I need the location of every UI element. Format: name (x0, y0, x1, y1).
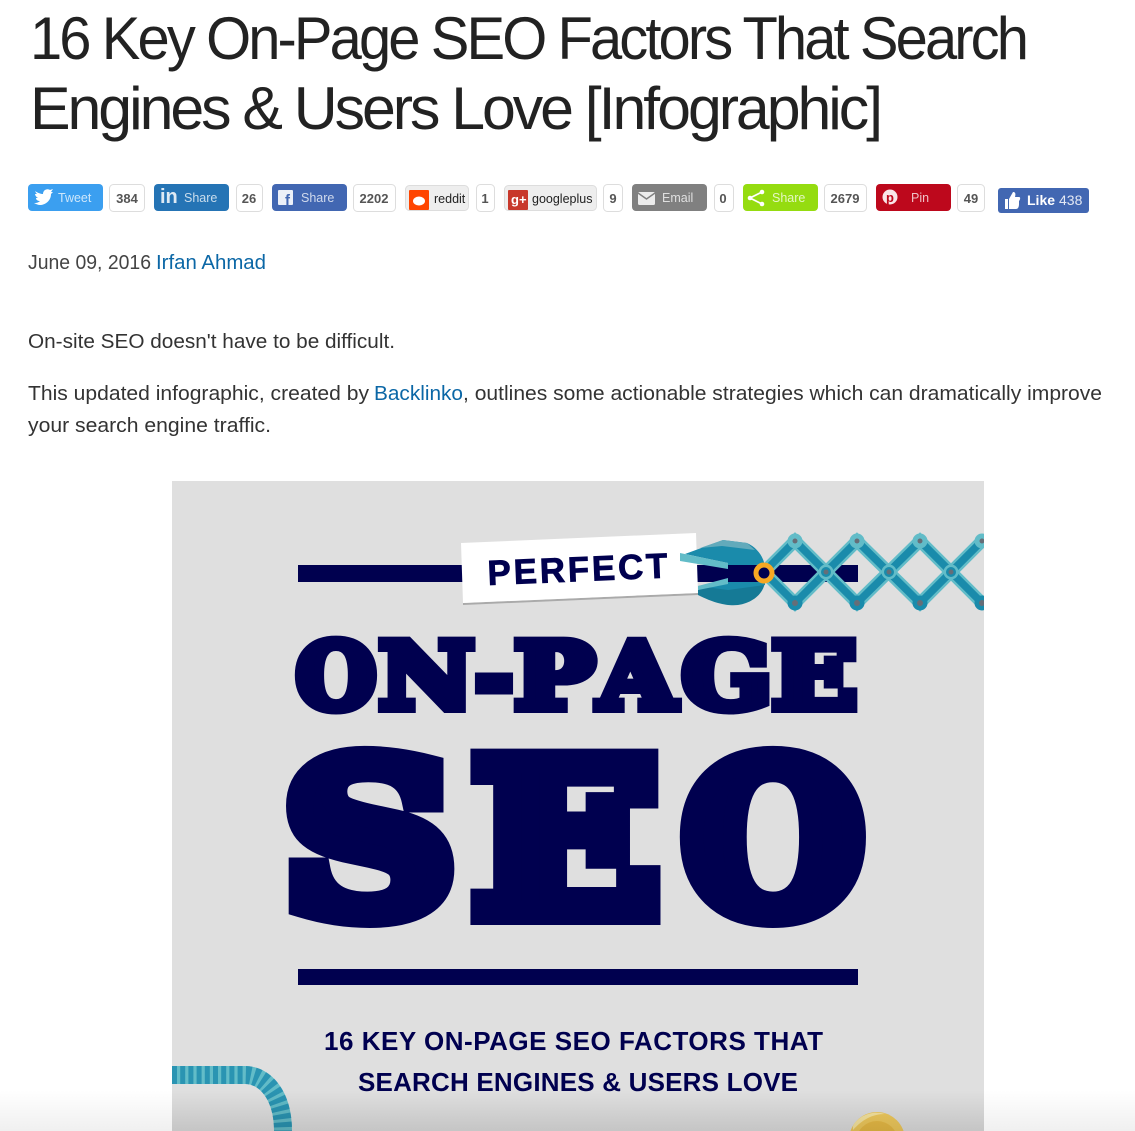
button: reddit: reddit (434, 192, 466, 206)
button: tweet: Tweet (58, 191, 92, 205)
button: tweet: 384 (116, 191, 139, 206)
infographic panel (172, 481, 1135, 1131)
icon: gold coin (849, 1112, 905, 1131)
subtitle: SEARCH ENGINES & USERS LOVE (358, 1067, 798, 1097)
button: tweet (28, 184, 144, 212)
button: googleplus (504, 184, 622, 212)
byline: Irfan Ahmad (156, 252, 266, 274)
button: linkedin: 26 (242, 191, 256, 206)
title: Engines & Users Love [Infographic] (30, 75, 880, 142)
button: googleplus: g+ (511, 192, 527, 207)
button: reddit: 1 (481, 191, 489, 206)
button: linkedin: in (160, 186, 178, 208)
heading: seo: E (473, 718, 659, 963)
top navy bar (298, 565, 858, 582)
button: email: 0 (719, 191, 727, 206)
heading: on-page: - (475, 624, 513, 730)
bottom navy bar (298, 969, 858, 985)
heading: on-page (296, 624, 857, 730)
heading: on-page: A (597, 624, 677, 730)
button: facebook like (998, 188, 1089, 213)
button: share: 2679 (831, 191, 859, 206)
intro text: This updated infographic, created by (28, 383, 369, 405)
intro text: On-site SEO doesn't have to be difficult. (28, 331, 395, 353)
button: pinterest: 49 (964, 191, 978, 206)
intro text (28, 331, 1102, 437)
social share bar (28, 184, 1089, 213)
button: googleplus: 9 (609, 191, 617, 206)
button: share: Share (772, 191, 805, 205)
button: pinterest: Pin (911, 191, 929, 205)
button: pinterest (876, 184, 984, 212)
button: reddit (406, 184, 494, 212)
button: email (632, 184, 734, 212)
button: googleplus: googleplus (532, 192, 592, 206)
intro text: your search engine traffic. (28, 415, 271, 437)
heading: seo: O (683, 718, 863, 963)
panel shading (172, 1090, 984, 1131)
subtitle (324, 1026, 823, 1097)
heading: seo (284, 718, 863, 963)
intro text: , outlines some actionable strategies which can dramatically improve (463, 383, 1102, 405)
title: 16 Key On-Page SEO Factors That Search (30, 5, 1026, 72)
icon: coiled tube (172, 1075, 283, 1131)
button: facebook (272, 184, 396, 212)
button: facebook: 2202 (360, 191, 388, 206)
button: pinterest: p (886, 190, 894, 205)
button: linkedin (154, 184, 262, 212)
button: email: Email (662, 191, 693, 205)
heading: on-page: G (682, 624, 772, 730)
button: facebook like: 438 (1059, 192, 1083, 208)
byline (28, 252, 266, 274)
label: perfect: PERFECT (487, 546, 668, 593)
bottom fade overlay (0, 1090, 1135, 1131)
button: share (743, 184, 866, 212)
heading: on-page: P (514, 624, 594, 730)
heading: on-page: E (772, 624, 857, 730)
icon: scissor arm (764, 530, 1135, 620)
button: facebook: Share (301, 191, 334, 205)
button: facebook like: Like (1027, 192, 1055, 208)
intro text: Backlinko (374, 383, 463, 405)
heading: on-page: N (379, 624, 474, 730)
heading: seo: S (284, 718, 455, 963)
label: perfect (461, 533, 698, 605)
button: facebook: f (285, 192, 291, 209)
button: linkedin: Share (184, 191, 217, 205)
title (30, 5, 1026, 142)
icon: claw (680, 540, 772, 605)
byline: June 09, 2016 (28, 252, 151, 274)
heading: on-page: O (296, 624, 376, 730)
subtitle: 16 KEY ON-PAGE SEO FACTORS THAT (324, 1026, 823, 1056)
